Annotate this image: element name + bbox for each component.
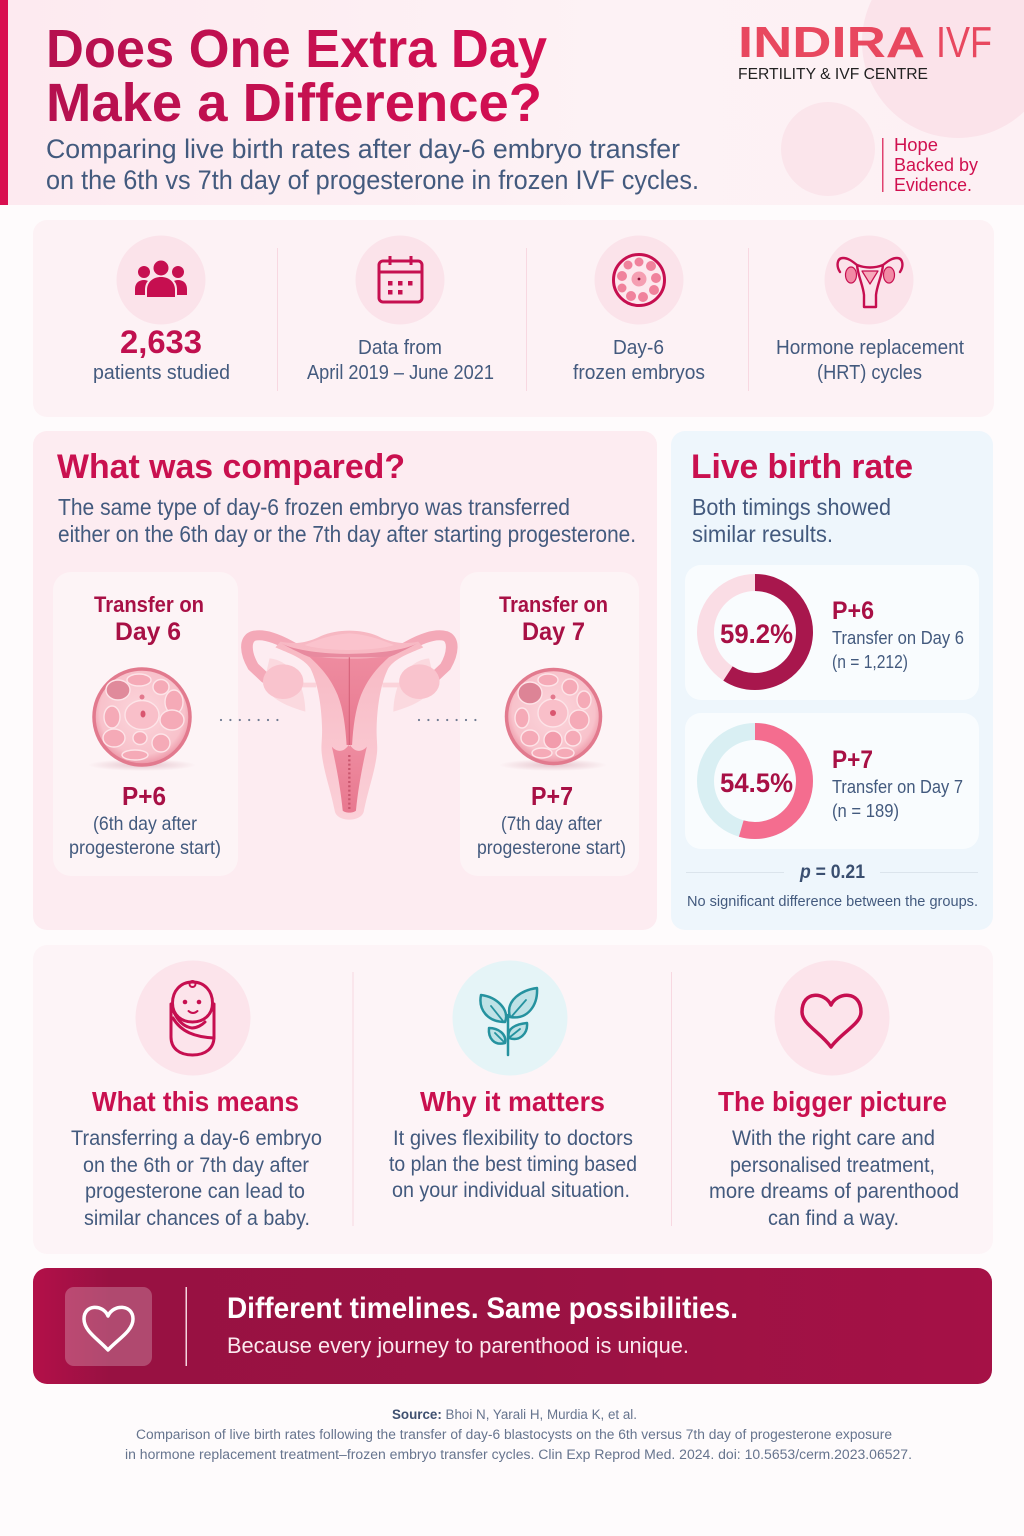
column: the bigger picture [709, 1086, 959, 1230]
icon: uterus [824, 236, 914, 324]
logo [738, 18, 992, 83]
panel: what was compared [33, 431, 657, 930]
banner [33, 1268, 992, 1384]
icon: baby [136, 960, 250, 1076]
title [46, 19, 547, 133]
logo: IVF [936, 18, 992, 67]
panel: takeaways [33, 945, 993, 1254]
column: what this means [71, 1086, 322, 1230]
column: what this means: on the 6th or 7th day after [83, 1153, 309, 1177]
stat: embryos: Day-6 [613, 337, 664, 359]
description [692, 494, 891, 547]
subtitle: Comparing live birth rates after day-6 embryo transfer [46, 134, 680, 164]
column: why it matters [389, 1086, 637, 1202]
stat: cycles: (HRT) cycles [817, 362, 922, 384]
icon: heart [774, 960, 890, 1076]
description: Both timings showed [692, 494, 891, 520]
tagline: Backed by [894, 155, 978, 175]
column: what this means: progesterone can lead to [85, 1179, 305, 1203]
banner text: Different timelines. Same possibilities. [227, 1292, 738, 1325]
title: Make a Difference? [46, 73, 542, 133]
card: day 6: Transfer on [94, 592, 204, 617]
donut chart: 59.2% [706, 582, 804, 682]
heading: What was compared? [57, 448, 405, 486]
icon: plant [452, 960, 568, 1076]
card: day 7 [460, 572, 639, 876]
connector dots left [221, 719, 279, 721]
tagline [882, 135, 978, 195]
donut chart: 59.2%: 59.2% [720, 619, 793, 649]
logo: FERTILITY & IVF CENTRE [738, 66, 928, 83]
tagline: Hope [894, 135, 938, 155]
subtitle [46, 134, 699, 195]
card: P+7 result [685, 713, 979, 849]
stat: embryos: frozen embryos [573, 362, 705, 384]
column: what this means: similar chances of a baby. [84, 1206, 310, 1230]
column: why it matters: on your individual situation. [392, 1178, 630, 1202]
description: either on the 6th day or the 7th day after starting progesterone. [58, 521, 636, 547]
stat: patients: patients studied [93, 362, 230, 384]
stat: dates: April 2019 – June 2021 [307, 362, 494, 384]
column: the bigger picture: more dreams of parenthood [709, 1179, 959, 1203]
description: The same type of day-6 frozen embryo was transferred [58, 494, 570, 520]
icon: embryo day 6 [88, 669, 196, 771]
tagline: Evidence. [894, 175, 972, 195]
stat: patients [93, 324, 230, 384]
donut chart: 54.5%: 54.5% [720, 768, 793, 798]
column: the bigger picture: personalised treatment, [730, 1153, 935, 1177]
icon: patients [116, 236, 206, 324]
icon: calendar [356, 236, 444, 324]
card: day 7: Day 7 [522, 618, 585, 646]
card: day 6 [53, 572, 238, 876]
stat: dates: Data from [358, 337, 442, 359]
card: P+7 result: (n = 189) [832, 800, 899, 821]
banner text [227, 1292, 738, 1358]
header band [0, 0, 1024, 205]
illustration: uterus [247, 631, 452, 820]
panel: live birth rate [671, 431, 993, 930]
column: why it matters: It gives flexibility to doctors [393, 1126, 633, 1150]
card: P+6 result: (n = 1,212) [832, 651, 908, 672]
column: the bigger picture: The bigger picture [718, 1086, 947, 1117]
p value: p = 0.21 [799, 862, 865, 883]
column: why it matters: Why it matters [420, 1086, 605, 1117]
significance note: No significant difference between the groups. [687, 893, 978, 910]
source citation: Comparison of live birth rates following the transfer of day-6 blastocysts on the 6th versus 7th day of progesterone exposure [136, 1427, 892, 1442]
stat: patients: 2,633 [120, 324, 202, 360]
card: day 6: (6th day after [93, 813, 197, 835]
column: what this means: Transferring a day-6 embryo [71, 1126, 322, 1150]
card: P+7 result: Transfer on Day 7 [832, 776, 963, 797]
title: Does One Extra Day [46, 19, 547, 79]
card: P+6 result: Transfer on Day 6 [832, 627, 964, 648]
column: the bigger picture: With the right care and [732, 1126, 935, 1150]
card: day 6: progesterone start) [69, 837, 221, 859]
source citation: Source: Bhoi N, Yarali H, Murdia K, et al. [392, 1407, 637, 1422]
card: day 6: P+6 [122, 781, 166, 811]
source citation [125, 1407, 912, 1462]
icon: embryo day 7 [499, 670, 607, 771]
card: day 7: Transfer on [499, 592, 608, 617]
logo: INDIRA [738, 18, 925, 67]
card: day 6: Day 6 [115, 618, 181, 646]
column: why it matters: to plan the best timing based [389, 1152, 637, 1176]
description: similar results. [692, 521, 833, 547]
stat: dates [307, 337, 494, 384]
source citation: in hormone replacement treatment–frozen embryo transfer cycles. Clin Exp Reprod Med. 2024. doi: 10.5653/cerm.2023.06527. [125, 1447, 912, 1462]
icon: heart in box [65, 1287, 152, 1366]
card: day 7: (7th day after [501, 813, 602, 835]
subtitle: on the 6th vs 7th day of progesterone in frozen IVF cycles. [46, 165, 699, 195]
column: what this means: What this means [92, 1086, 299, 1117]
heading: Live birth rate [691, 448, 913, 486]
card: day 7: progesterone start) [477, 837, 626, 859]
column: the bigger picture: can find a way. [768, 1206, 899, 1230]
icon: embryo [594, 236, 684, 324]
donut chart: 54.5% [706, 732, 804, 830]
card: day 7: P+7 [531, 781, 573, 811]
description [58, 494, 636, 547]
card: P+7 result: P+7 [832, 746, 873, 774]
stat: cycles [776, 337, 964, 384]
panel: key facts [33, 220, 994, 417]
stat: embryos [573, 337, 705, 384]
stat: cycles: Hormone replacement [776, 337, 964, 359]
banner text: Because every journey to parenthood is unique. [227, 1333, 689, 1358]
card: P+6 result [685, 565, 979, 700]
card: P+6 result: P+6 [832, 597, 874, 625]
connector dots right [419, 719, 477, 721]
